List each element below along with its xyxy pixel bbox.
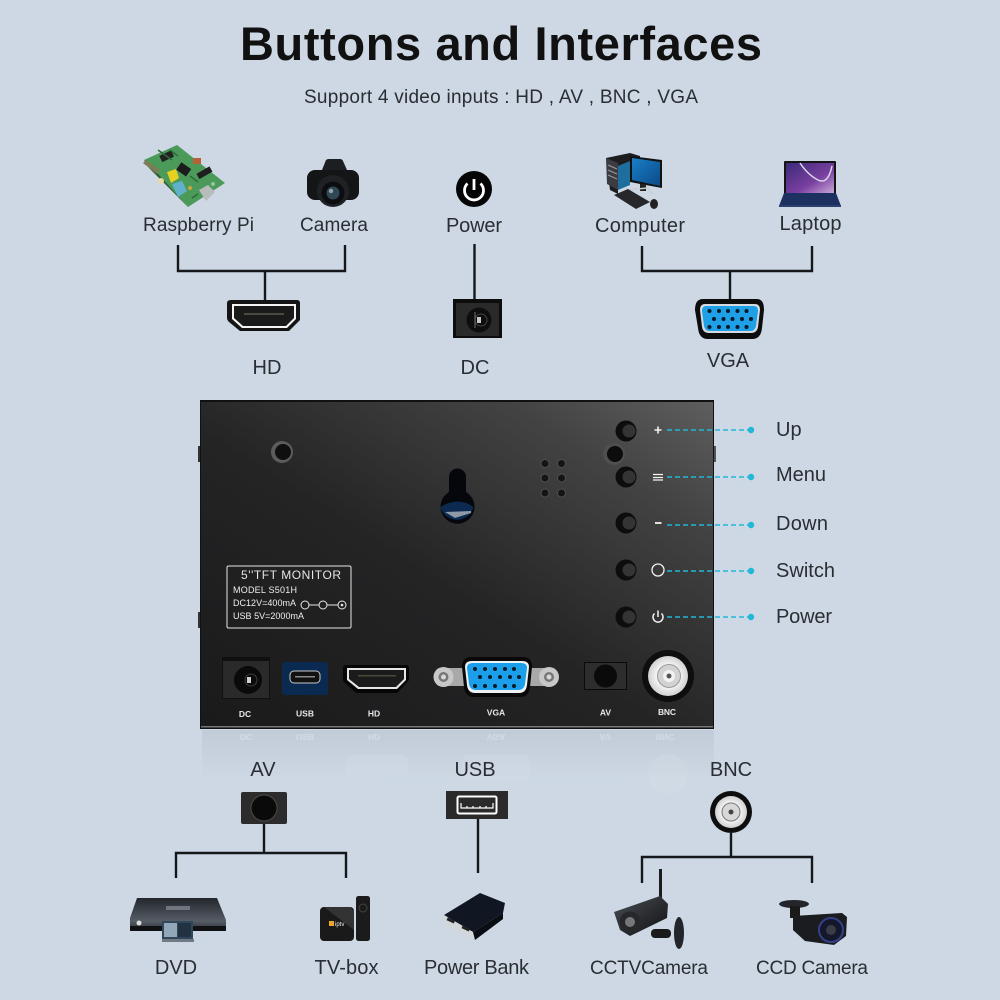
callout: Switch <box>667 560 835 582</box>
icon: TV box and remote: iptv <box>335 922 344 928</box>
icon: USB port <box>446 791 508 819</box>
port labels: DC <box>239 709 251 719</box>
label: USB: USB <box>454 759 496 781</box>
connector lines: VGA <box>642 246 812 300</box>
callout: Down <box>667 513 828 535</box>
keyhole slot <box>440 469 474 524</box>
port labels: BNC <box>658 707 676 717</box>
port: AV <box>584 662 626 690</box>
icon: BNC port <box>710 791 752 833</box>
spec plate: USB 5V=2000mA <box>233 611 304 621</box>
monitor reflection: USB <box>296 732 314 742</box>
icon: power bank <box>444 893 505 940</box>
title: Buttons and Interfaces <box>240 17 762 70</box>
label: DVD: DVD <box>155 957 197 979</box>
label: Raspberry Pi: Raspberry Pi <box>143 215 254 236</box>
callout: Up: Up <box>776 419 802 441</box>
icon: TV box and remote <box>320 896 370 941</box>
connector lines: BNC <box>642 833 812 883</box>
port: VGA <box>434 657 559 697</box>
icon: AV port <box>241 792 287 824</box>
monitor reflection: AV <box>599 732 611 742</box>
spec plate: 5''TFT MONITOR <box>241 568 341 582</box>
callout: Power: Power <box>776 606 832 628</box>
label: CCD Camera: CCD Camera <box>756 958 868 979</box>
connector lines: AV <box>176 824 346 878</box>
icon: desktop computer <box>606 153 662 209</box>
icon: DC jack <box>453 299 502 338</box>
mounting screw hole <box>271 441 293 463</box>
callout: Down: Down <box>776 513 828 535</box>
monitor reflection: VGA <box>487 732 505 742</box>
label: AV: AV <box>250 759 276 781</box>
callout: Switch: Switch <box>776 560 835 582</box>
label: Power Bank: Power Bank <box>424 957 530 979</box>
icon: laptop <box>779 161 841 207</box>
port labels: VGA <box>487 708 505 718</box>
group: DC input <box>446 171 502 379</box>
icon: CCTV camera <box>614 869 684 949</box>
spec plate <box>227 566 351 628</box>
connector lines: HD <box>178 245 345 301</box>
group: BNC output <box>590 759 868 979</box>
panel: monitor back <box>198 400 716 729</box>
connector line: USB <box>477 819 479 873</box>
label: BNC: BNC <box>710 759 752 781</box>
monitor reflection <box>202 730 714 794</box>
callout: Menu: Menu <box>776 464 826 486</box>
icon: power symbol <box>456 171 492 207</box>
icon: DVD player <box>130 898 226 942</box>
callout: Up <box>667 419 802 441</box>
icon: Raspberry Pi board <box>143 145 225 207</box>
port labels: AV <box>600 708 611 718</box>
monitor reflection: BNC <box>656 732 674 742</box>
label: CCTVCamera: CCTVCamera <box>590 958 708 979</box>
buttons <box>616 420 636 628</box>
icon: CCD camera <box>779 900 847 945</box>
speaker holes <box>541 460 566 497</box>
label: Camera: Camera <box>300 215 368 236</box>
label: Power: Power <box>446 215 502 237</box>
icon: VGA port <box>695 299 764 339</box>
spec plate: MODEL S501H <box>233 585 297 595</box>
port: DC <box>222 657 270 699</box>
icon: camera <box>307 159 359 207</box>
port: HDMI <box>343 665 409 693</box>
subtitle: Support 4 video inputs : HD , AV , BNC , VGA <box>304 87 698 108</box>
label: HD: HD <box>253 357 281 379</box>
monitor reflection: HD <box>368 732 380 742</box>
label: DC: DC <box>461 357 489 379</box>
callout: Menu <box>667 464 826 486</box>
label: TV-box: TV-box <box>314 957 378 979</box>
port: USB <box>282 662 328 695</box>
group: VGA input <box>595 153 842 372</box>
group: USB output <box>424 759 530 979</box>
spec plate: DC12V=400mA <box>233 598 296 608</box>
label: Laptop: Laptop <box>780 213 842 235</box>
port: BNC <box>642 650 694 702</box>
label: Computer: Computer <box>595 215 685 237</box>
callout: Power <box>667 606 832 628</box>
connector line: DC <box>473 244 476 300</box>
port labels <box>239 707 676 719</box>
monitor reflection: DC <box>240 732 252 742</box>
extra screw <box>603 443 625 465</box>
port labels: HD <box>368 708 380 718</box>
group: HD input <box>143 145 368 379</box>
icon: HDMI port <box>227 300 300 331</box>
port labels: USB <box>296 708 314 718</box>
label: VGA: VGA <box>707 350 750 372</box>
button symbols <box>652 426 664 622</box>
group: AV output <box>130 759 378 979</box>
